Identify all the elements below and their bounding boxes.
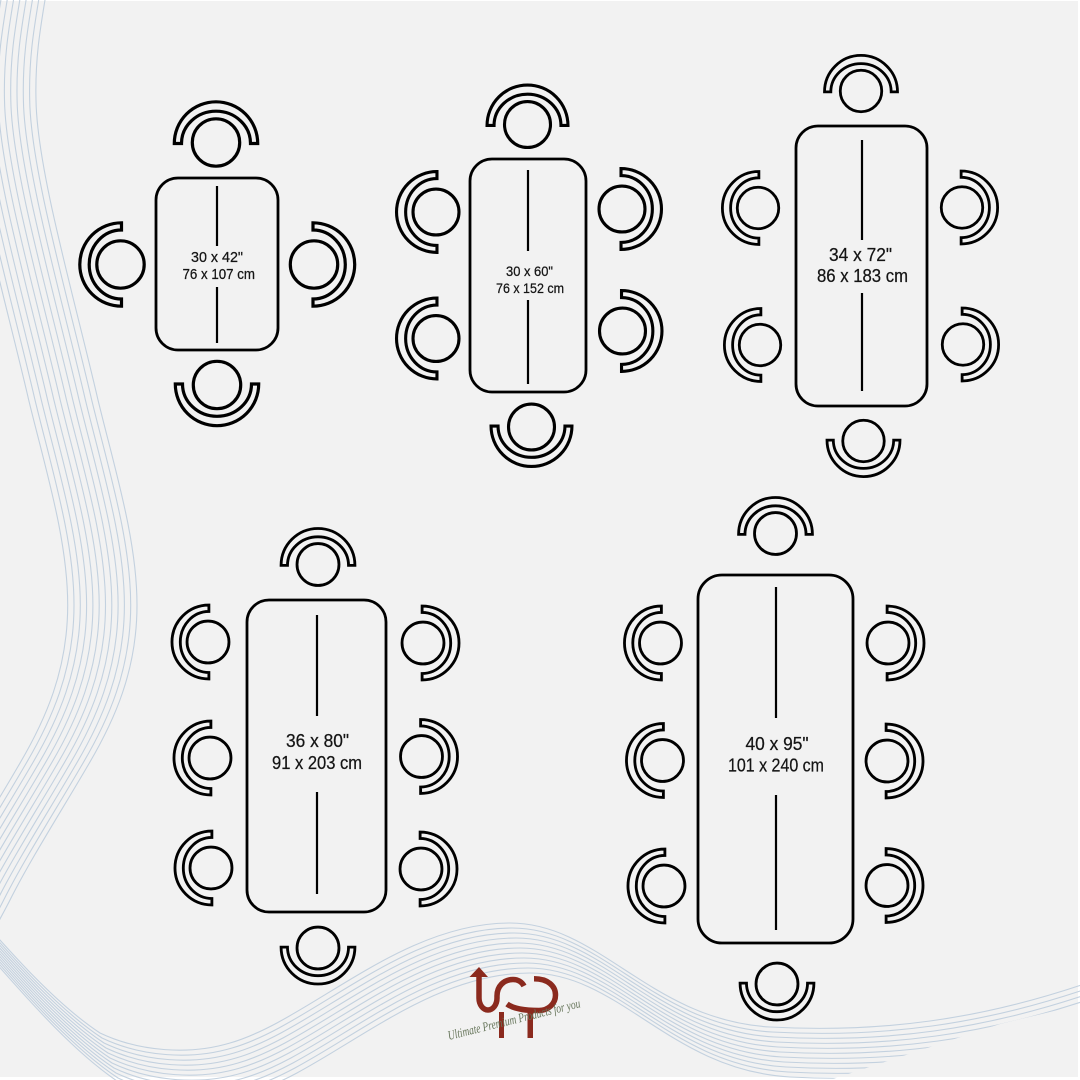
size label: 40 x 95"	[746, 733, 808, 754]
chair right lower	[866, 849, 923, 922]
size label: 76 x 152 cm	[496, 280, 564, 296]
chair right upper	[867, 606, 924, 680]
chair left upper	[172, 605, 229, 679]
chair top	[825, 55, 897, 112]
chair right middle	[401, 720, 458, 793]
size label: 91 x 203 cm	[272, 752, 362, 773]
chair right lower	[942, 308, 999, 381]
centre line bottom	[216, 287, 218, 343]
chair left lower	[175, 831, 232, 905]
size label: 86 x 183 cm	[817, 265, 908, 286]
chair left lower	[724, 309, 781, 381]
panel: 8-seat table 36 x 80	[172, 528, 459, 984]
centre line bottom	[316, 792, 318, 894]
panel: 4-seat table 30 x 42	[80, 102, 355, 426]
chair bottom	[281, 927, 355, 984]
chair left middle	[174, 721, 231, 795]
chair bottom	[827, 420, 900, 477]
chair left upper	[624, 606, 681, 680]
panel: 8-seat table 40 x 95	[624, 497, 924, 1020]
chair right middle	[866, 724, 923, 798]
chair left upper	[722, 172, 779, 244]
centre line top	[775, 587, 777, 718]
logo left leg	[499, 1012, 504, 1038]
chair top	[174, 102, 258, 166]
centre line top	[316, 615, 318, 716]
chair left lower	[628, 849, 685, 923]
chair right upper	[402, 606, 459, 680]
logo	[446, 967, 582, 1043]
chair left upper	[397, 172, 459, 252]
size label: 30 x 60"	[506, 263, 553, 279]
chair left	[80, 223, 144, 306]
chair top	[487, 85, 568, 147]
panel: 6-seat table 30 x 60	[397, 85, 662, 466]
centre line top	[861, 140, 863, 240]
chair right lower	[600, 291, 662, 371]
chair right upper	[941, 171, 998, 244]
panel: 6-seat table 34 x 72	[722, 55, 999, 477]
chair bottom	[175, 361, 259, 426]
chair top	[739, 497, 812, 554]
left decorative wave lines	[0, 0, 137, 975]
table top	[470, 159, 586, 392]
chair left middle	[626, 724, 683, 797]
chair left lower	[397, 298, 459, 379]
chair bottom	[740, 963, 814, 1020]
table top	[796, 126, 927, 406]
chair right upper	[599, 169, 661, 249]
size label: 34 x 72"	[829, 244, 892, 265]
chair right	[290, 223, 355, 306]
centre line bottom	[861, 293, 863, 391]
chair bottom	[491, 404, 572, 466]
centre line top	[216, 186, 218, 246]
logo arrow head	[470, 967, 488, 977]
logo tagline: Ultimate Premium Products for you	[446, 995, 582, 1043]
size label: 101 x 240 cm	[728, 754, 824, 776]
centre line bottom	[527, 300, 529, 384]
centre line top	[527, 170, 529, 251]
chair top	[281, 528, 355, 585]
size label: 76 x 107 cm	[182, 266, 255, 283]
table top	[156, 178, 278, 350]
centre line bottom	[775, 795, 777, 930]
table top	[698, 575, 853, 943]
logo right leg	[528, 1012, 533, 1038]
bottom decorative wave lines	[0, 922, 1080, 1080]
logo mark	[479, 975, 556, 1010]
table top	[247, 600, 386, 912]
size label: 36 x 80"	[286, 730, 349, 751]
chair right lower	[400, 832, 457, 906]
size label: 30 x 42"	[191, 249, 243, 266]
